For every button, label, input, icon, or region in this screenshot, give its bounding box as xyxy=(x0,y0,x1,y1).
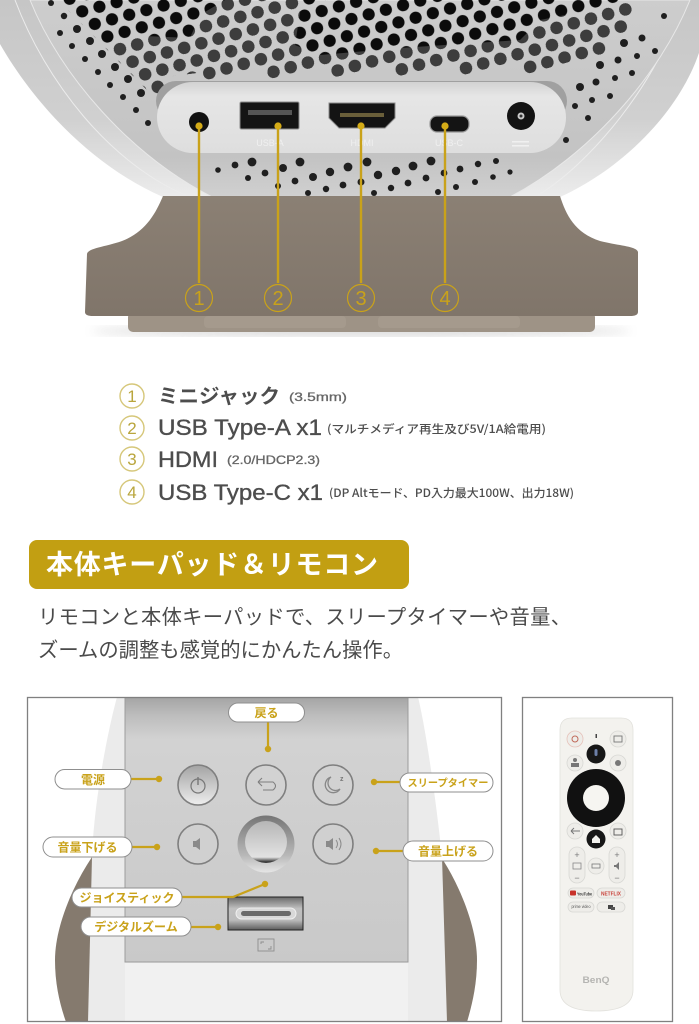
callout 2: 2 xyxy=(272,288,284,310)
description text: リモコンと本体キーパッドで、スリープタイマーや音量、 xyxy=(38,600,571,630)
button: volume down xyxy=(178,824,218,864)
port: DC power xyxy=(507,102,535,146)
remote: button glyphs: + xyxy=(574,850,580,860)
item 4: USB Type-C: (DP Altモード、PD入力最大100W、出力18W) xyxy=(329,485,574,501)
base shadow xyxy=(91,326,631,336)
label: back xyxy=(228,703,304,752)
item 1: mini jack xyxy=(120,380,347,409)
label: volume down xyxy=(43,837,160,857)
button: sleep timer: z xyxy=(340,776,344,783)
panel: body keypad xyxy=(27,697,502,1022)
projector body rim xyxy=(0,0,699,197)
remote: button glyphs: − xyxy=(614,873,620,883)
item 2: USB Type-A: USB Type-A x1 xyxy=(158,415,322,440)
panel: remote control xyxy=(522,698,672,1022)
callout 1: 1 xyxy=(193,288,205,310)
label: volume up xyxy=(373,841,493,861)
description text xyxy=(38,600,571,663)
port: HDMI xyxy=(329,103,395,148)
item 4: USB Type-C: 4 xyxy=(127,483,137,502)
label: joystick: ジョイスティック xyxy=(80,889,174,906)
label: power: 電源 xyxy=(81,771,105,788)
item 1: mini jack: ミニジャック xyxy=(158,380,280,409)
silver key panel xyxy=(125,697,408,962)
icon: fullscreen xyxy=(258,939,274,951)
port bracket xyxy=(156,81,567,153)
remote body xyxy=(560,718,633,1011)
remote: BenQ logo: BenQ xyxy=(582,975,610,986)
label: sleep timer: スリープタイマー xyxy=(408,774,488,790)
remote: app buttons: prime video xyxy=(572,904,591,909)
callout 1 xyxy=(186,122,212,312)
port: HDMI: HDMI xyxy=(350,138,374,148)
item 2: USB Type-A: 2 xyxy=(127,419,137,438)
label: joystick xyxy=(72,881,268,907)
item 2: USB Type-A xyxy=(120,415,546,440)
port: USB-C: USB-C xyxy=(435,138,463,148)
section heading xyxy=(29,540,409,589)
port: USB-C xyxy=(430,116,469,148)
item 3: HDMI: 3 xyxy=(127,450,137,469)
lower white body xyxy=(125,963,408,1022)
button: back xyxy=(246,765,286,805)
label: power xyxy=(55,770,162,789)
label: volume down: 音量下げる xyxy=(57,838,118,856)
label: sleep timer xyxy=(371,773,493,792)
remote: button glyphs: + xyxy=(614,850,620,860)
item 3: HDMI: HDMI xyxy=(158,447,218,472)
button: volume up xyxy=(313,824,353,864)
white body xyxy=(88,697,447,1022)
panel border xyxy=(28,698,502,1022)
button: power xyxy=(178,765,218,805)
label: digital zoom: デジタルズーム xyxy=(94,918,178,935)
label: back: 戻る xyxy=(254,704,279,721)
remote: button glyphs xyxy=(571,734,622,883)
remote: home button xyxy=(586,830,606,848)
callout 2 xyxy=(264,122,292,312)
item 4: USB Type-C: USB Type-C x1 xyxy=(158,480,323,505)
item 3: HDMI xyxy=(120,447,320,472)
stand foot xyxy=(128,312,595,332)
port: USB-A xyxy=(240,102,299,148)
remote: button glyphs: − xyxy=(574,873,580,883)
callout 4 xyxy=(432,122,458,312)
item 2: USB Type-A: (マルチメディア再生及び5V/1A給電用) xyxy=(327,421,546,437)
remote: mic button xyxy=(586,744,606,764)
item 4: USB Type-C xyxy=(120,480,574,505)
product photo: rear ports xyxy=(0,0,699,336)
item 1: mini jack: (3.5mm) xyxy=(289,390,347,404)
button: sleep timer xyxy=(313,765,353,805)
stand base xyxy=(85,196,638,316)
label: digital zoom xyxy=(81,917,221,936)
callout 3 xyxy=(348,122,374,312)
brown stand behind body xyxy=(55,857,477,1022)
port: mini jack xyxy=(189,112,209,132)
section heading: 本体キーパッド＆リモコン xyxy=(46,543,378,582)
port list xyxy=(120,380,574,505)
remote: app buttons xyxy=(570,890,622,910)
remote: top buttons xyxy=(567,731,626,912)
label: volume up: 音量上げる xyxy=(418,842,478,860)
item 3: HDMI: (2.0/HDCP2.3) xyxy=(227,453,320,467)
item 1: mini jack: 1 xyxy=(127,387,137,406)
joystick xyxy=(238,816,294,872)
callout lines and numbers xyxy=(186,122,458,312)
speaker holes xyxy=(48,0,667,196)
digital zoom key xyxy=(228,897,303,930)
callout 4: 4 xyxy=(439,288,451,310)
description text: ズームの調整も感覚的にかんたん操作。 xyxy=(38,633,403,663)
remote: app buttons: NETFLIX xyxy=(601,892,622,898)
callout 3: 3 xyxy=(355,288,367,310)
port: USB-A: USB-A xyxy=(256,138,284,148)
remote: app buttons: YouTube xyxy=(577,892,592,896)
remote: d-pad xyxy=(567,769,625,827)
